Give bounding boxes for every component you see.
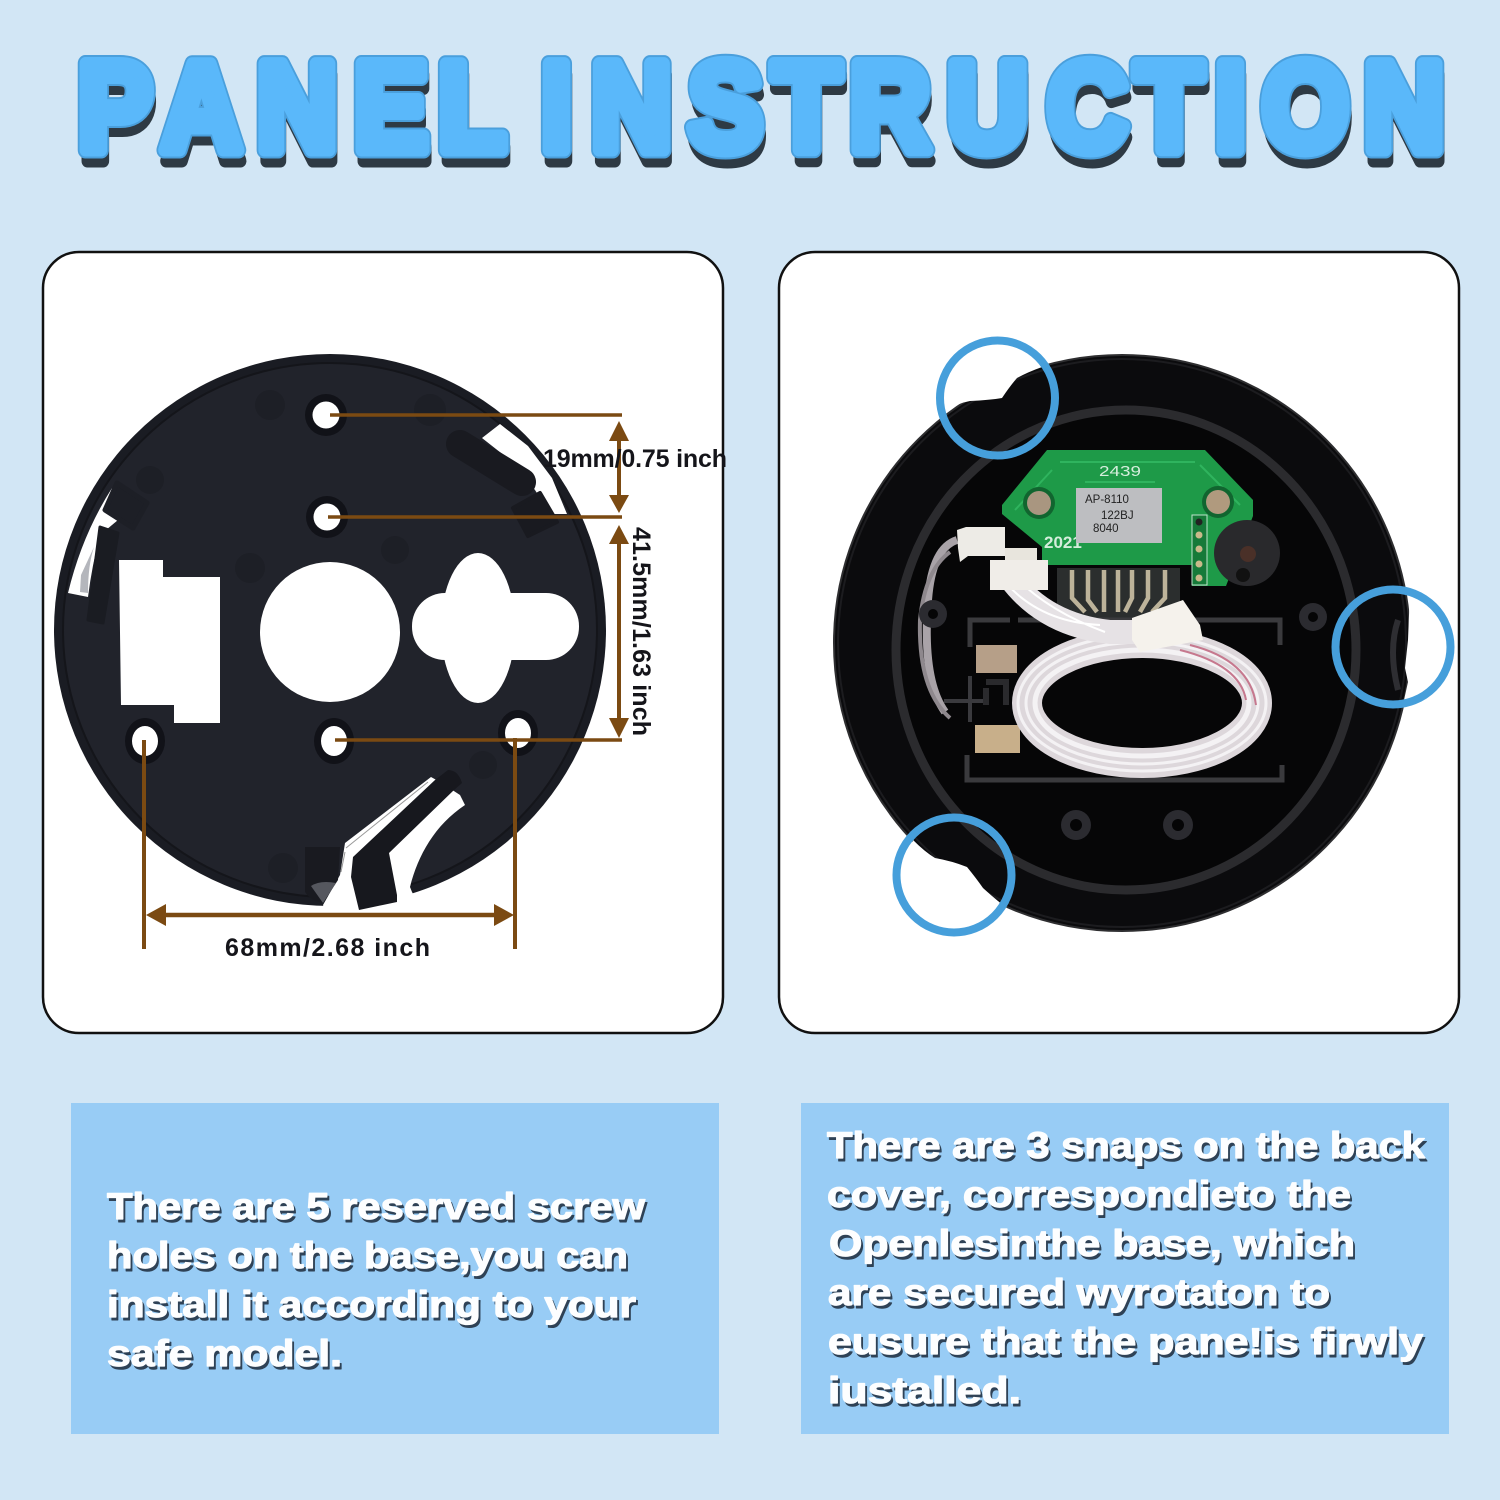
text box: snaps: eusure that the pane!is firwly (830, 1324, 1425, 1365)
text box: screw holes: holes on the base,you can (107, 1235, 628, 1276)
flex cable (1057, 568, 1180, 620)
battery contacts (944, 645, 1020, 753)
text box: snaps: Openlesinthe base, which (831, 1226, 1357, 1267)
screw holes (125, 394, 538, 764)
snap notch: right (1404, 590, 1430, 700)
left snap slit (68, 483, 147, 623)
base plate disc (54, 354, 606, 925)
circuit board: 122BJ (1101, 510, 1134, 522)
text box: snaps (801, 1103, 1449, 1434)
label: 41.5mm: 41.5mm/1.63 inch (627, 527, 655, 736)
screws (1023, 487, 1055, 519)
text box: snaps: There are 3 snaps on the back (829, 1128, 1427, 1169)
text box: snaps: cover, correspondieto the (827, 1174, 1351, 1215)
wire loop (1018, 635, 1266, 771)
back cover outer shell (834, 355, 1410, 931)
panel: base plate dimensions (43, 252, 727, 1033)
title: PANEL INSTRUCTION (78, 38, 1444, 177)
dimension: 19mm spacing (328, 415, 629, 517)
top right snap slit (460, 424, 567, 536)
circuit board (1002, 450, 1253, 586)
callout: snap circle bottom (896, 818, 1012, 932)
label: 68mm: 68mm/2.68 inch (225, 934, 430, 962)
text box: screw holes: install it according to your (107, 1284, 636, 1325)
chip label (1076, 488, 1162, 543)
board marking: 2439 (1099, 463, 1141, 480)
text box: snaps: cover, correspondieto the (829, 1177, 1353, 1218)
text box: snaps: eusure that the pane!is firwly (828, 1321, 1423, 1362)
circuit board: 2021 (1044, 533, 1082, 552)
text box: snaps: are secured wyrotaton to (828, 1272, 1330, 1313)
text box: screw holes: holes on the base,you can (109, 1238, 630, 1279)
label: 19mm: 19mm/0.75 inch (543, 445, 727, 473)
ribbon wires and connectors (920, 527, 1203, 718)
keyhole opening (412, 553, 579, 703)
callout: snap circle top (940, 340, 1055, 456)
text box: snaps: iustalled. (828, 1370, 1021, 1411)
text box: screw holes: install it according to your (109, 1287, 638, 1328)
snap notch: bottom (900, 840, 1012, 950)
text box: snaps: iustalled. (830, 1373, 1023, 1414)
dimension: 68mm spacing (144, 738, 515, 949)
text box: screw holes: safe model. (109, 1336, 344, 1377)
dimension: 41.5mm spacing (335, 525, 629, 740)
rectangular window (119, 560, 220, 723)
faint moulding marks (136, 390, 497, 883)
bottom snap opening (305, 770, 465, 925)
text box: screw holes (71, 1103, 719, 1434)
circuit board: 8040 (1093, 523, 1119, 535)
text box: screw holes: There are 5 reserved screw (107, 1186, 645, 1227)
standoffs (919, 600, 1327, 840)
centre hole (260, 562, 400, 702)
circuit board: AP-8110 (1085, 494, 1129, 506)
text box: snaps: There are 3 snaps on the back (827, 1125, 1425, 1166)
snap notch: top (930, 340, 1042, 411)
text box: snaps: are secured wyrotaton to (830, 1275, 1332, 1316)
panel: back cover with snaps (779, 252, 1459, 1033)
battery bay frame (967, 620, 1282, 780)
text box: screw holes: safe model. (107, 1333, 342, 1374)
title: PANEL INSTRUCTION (80, 49, 1446, 188)
callout: snap circle right (1336, 590, 1450, 704)
header pins (1192, 515, 1207, 585)
text box: screw holes: There are 5 reserved screw (109, 1189, 647, 1230)
title: PANEL INSTRUCTION (78, 38, 1444, 177)
buzzer (1214, 520, 1280, 586)
text box: snaps: Openlesinthe base, which (829, 1223, 1355, 1264)
